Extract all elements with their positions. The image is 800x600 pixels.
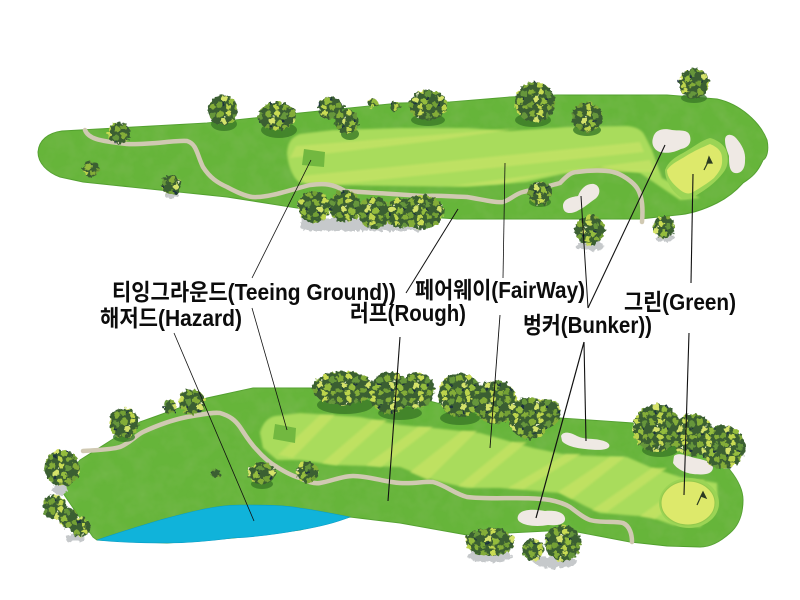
- leader lines: [174, 145, 693, 521]
- trees: bottom course: [43, 371, 745, 568]
- green: top course: [665, 138, 728, 199]
- tee: bottom course: [273, 424, 296, 443]
- label: bunker: 벙커(Bunker)): [523, 312, 652, 338]
- label: green: 그린(Green): [624, 289, 736, 315]
- trees: top course: [83, 68, 709, 251]
- bunkers: top course: [563, 129, 745, 213]
- rough: bottom course ground: [63, 388, 743, 547]
- label: hazard: 해저드(Hazard): [100, 305, 242, 331]
- cart path: top course: [85, 130, 642, 222]
- panel: bottom golf hole: [43, 371, 750, 568]
- label: fairway: 페어웨이(FairWay): [415, 277, 585, 303]
- label: teeing ground: 티잉그라운드(Teeing Ground)): [112, 279, 396, 305]
- panel: top golf hole: [30, 68, 775, 251]
- cart path: bottom course: [83, 413, 632, 542]
- fairway: top course: [287, 126, 700, 200]
- green: bottom course: [659, 478, 719, 528]
- fairway: bottom course: [260, 413, 718, 527]
- tee: top course: [302, 149, 325, 167]
- flag: [704, 157, 712, 170]
- label: rough: 러프(Rough): [350, 300, 466, 326]
- flag: [697, 492, 706, 505]
- rough: top course ground: [38, 95, 768, 219]
- bunkers: bottom course: [518, 433, 713, 526]
- water hazard: [97, 505, 350, 543]
